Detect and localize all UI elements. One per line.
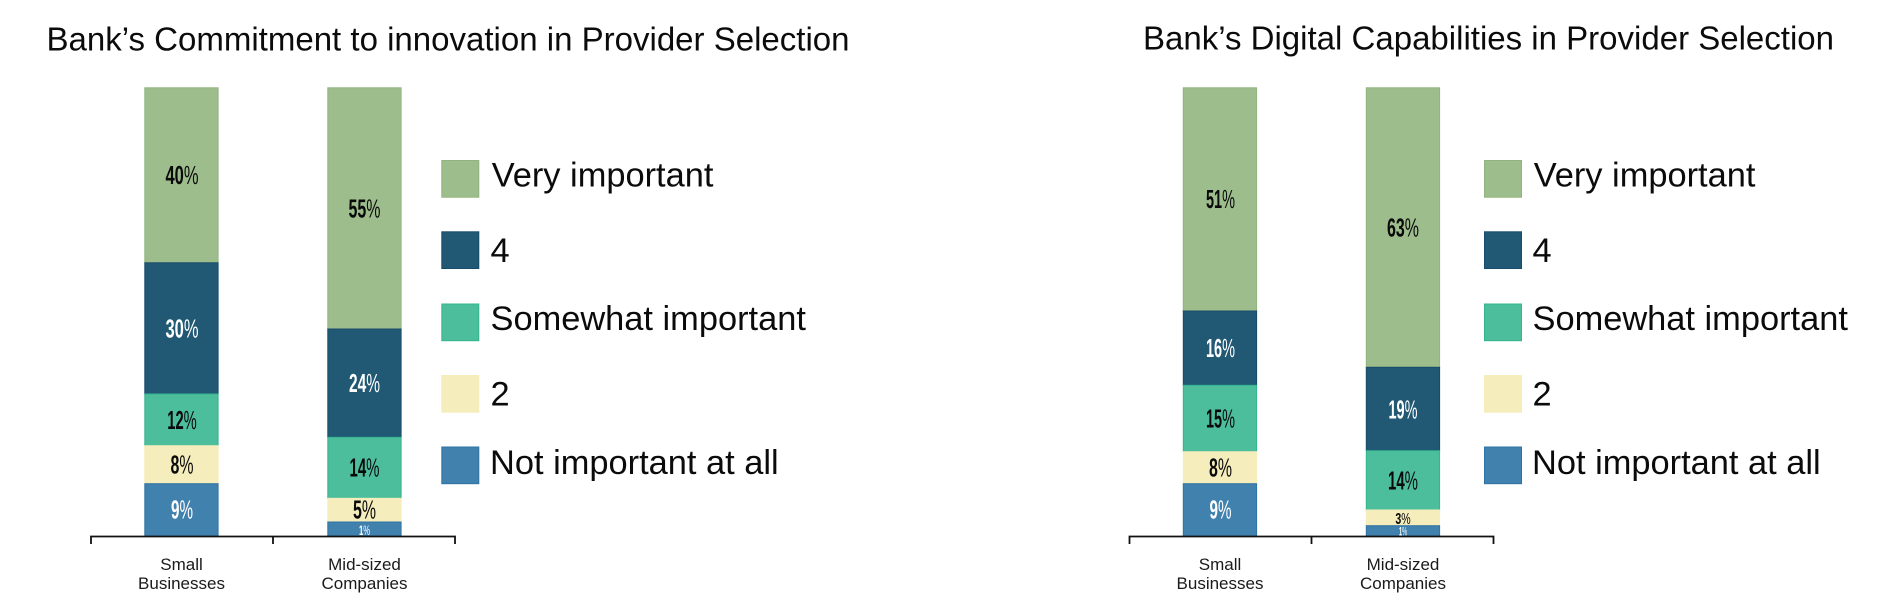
stacked bar: mid-sized companies: 5%	[353, 495, 376, 525]
panel: digital capabilities	[1130, 20, 1848, 593]
stacked bar: mid-sized companies: 3%	[1395, 511, 1411, 528]
stacked bar: mid-sized companies	[1366, 88, 1440, 539]
stacked bar: mid-sized companies: 14%	[1388, 465, 1418, 495]
title: digital capabilities: Bank’s Digital Capabilities in Provider Selection	[1143, 20, 1834, 57]
stacked bar: small businesses: 9%	[171, 495, 193, 525]
legend	[442, 157, 806, 484]
stacked bar: small businesses: 15%	[1206, 404, 1235, 434]
legend: Somewhat important	[1532, 300, 1848, 338]
stacked bar: mid-sized companies: 19%	[1388, 394, 1418, 424]
legend: Somewhat important	[490, 300, 806, 338]
stacked bar: small businesses: 30%	[166, 313, 198, 343]
axis label: small businesses: Small	[1199, 555, 1241, 574]
axis label: mid-sized companies: Mid-sized	[1367, 555, 1439, 574]
axis label: mid-sized companies: Companies	[322, 574, 408, 593]
axis label: mid-sized companies: Mid-sized	[328, 555, 401, 574]
stacked bar: small businesses: 51%	[1206, 184, 1235, 214]
stacked bar: mid-sized companies: 24%	[349, 368, 380, 398]
stacked bar: small businesses: 8%	[1209, 453, 1232, 483]
stacked bar: small businesses: 16%	[1206, 333, 1235, 363]
stacked bar: mid-sized companies: 63%	[1387, 213, 1419, 243]
axis label: small businesses: Small	[160, 555, 203, 574]
stacked bar: mid-sized companies	[328, 88, 401, 538]
stacked bar: mid-sized companies: 1%	[359, 522, 370, 538]
stacked bar: mid-sized companies: 55%	[348, 193, 380, 223]
stacked bar: small businesses	[1183, 88, 1257, 536]
stacked bar: mid-sized companies: 1%	[1399, 527, 1407, 539]
legend: Not important at all	[490, 444, 779, 482]
stacked bar: small businesses: 9%	[1210, 495, 1232, 525]
legend: 2	[490, 376, 510, 414]
stacked bar: small businesses: 12%	[167, 405, 197, 435]
stacked bar: mid-sized companies: 14%	[350, 452, 380, 482]
stacked bar: small businesses: 8%	[170, 449, 194, 479]
legend: 2	[1532, 376, 1552, 414]
axis label: small businesses: Businesses	[138, 574, 225, 593]
legend: Very important	[1534, 157, 1756, 195]
panel: commitment to innovation	[46, 21, 850, 593]
axis label: mid-sized companies: Companies	[1360, 574, 1446, 593]
legend: 4	[1532, 232, 1552, 270]
title: commitment to innovation: Bank’s Commitment to innovation in Provider Selection	[46, 21, 850, 58]
stacked bar: small businesses: 40%	[166, 160, 198, 190]
stacked bar: small businesses	[145, 88, 218, 536]
legend	[1484, 157, 1848, 484]
axis with ticks	[91, 536, 455, 544]
legend: Very important	[492, 157, 714, 195]
legend: 4	[490, 232, 510, 270]
axis label: small businesses: Businesses	[1177, 574, 1263, 593]
legend: Not important at all	[1532, 444, 1821, 482]
axis with ticks	[1130, 536, 1494, 544]
